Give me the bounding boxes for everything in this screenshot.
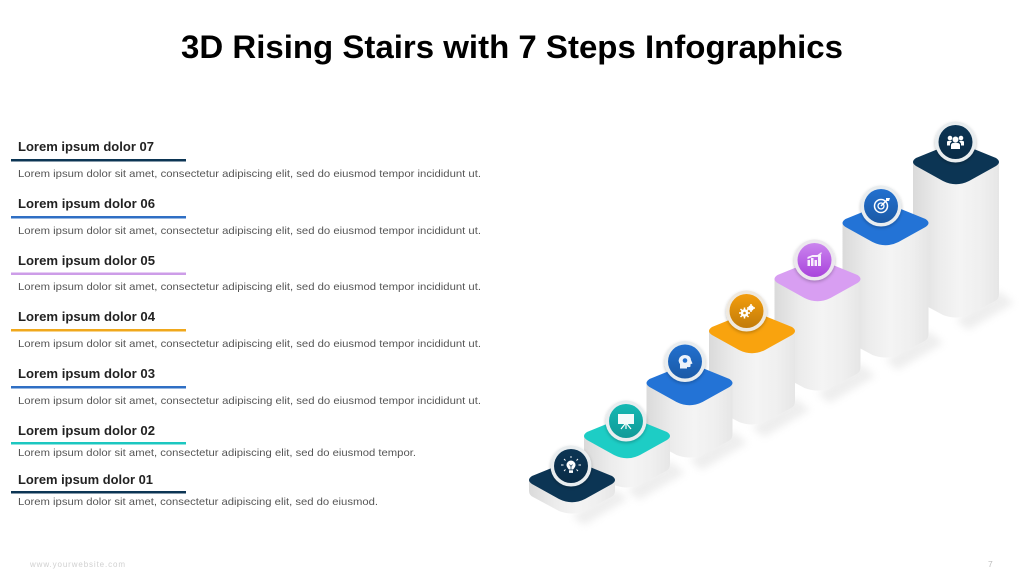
list item 01: Lorem ipsum dolor 01 (18, 472, 153, 487)
icon badge 5: bar chart (794, 240, 835, 280)
icon badge 6: target (860, 186, 902, 226)
list item 07: Lorem ipsum dolor sit amet, consectetur adipiscing elit, sed do eiusmod tempor incididunt ut. (18, 169, 481, 180)
list item 04: Lorem ipsum dolor sit amet, consectetur adipiscing elit, sed do eiusmod tempor incididunt ut. (18, 339, 481, 350)
list item 03: Lorem ipsum dolor 03 (18, 366, 155, 381)
step 5 (774, 260, 876, 403)
step 2 (584, 418, 685, 500)
step 6 (842, 204, 944, 370)
text list (11, 139, 481, 508)
list item 01: Lorem ipsum dolor sit amet, consectetur adipiscing elit, sed do eiusmod. (18, 497, 378, 508)
title: 3D Rising Stairs with 7 Steps Infographics (181, 29, 843, 65)
footer website: www.yourwebsite.com (29, 560, 125, 569)
list item 04: Lorem ipsum dolor 04 (18, 309, 156, 324)
list item 01 (11, 472, 378, 508)
icon badge 2: presentation board (606, 400, 646, 442)
icon badge 3: head with idea (664, 341, 706, 382)
step 4 (709, 312, 810, 437)
stairs chart (529, 122, 1014, 525)
list item 05: Lorem ipsum dolor 05 (18, 253, 155, 268)
icon badge 7: team (935, 122, 976, 162)
step 1 (529, 462, 628, 525)
list item 07 (11, 139, 481, 180)
list item 05: Lorem ipsum dolor sit amet, consectetur adipiscing elit, sed do eiusmod tempor incididunt ut. (18, 282, 481, 293)
list item 03: Lorem ipsum dolor sit amet, consectetur adipiscing elit, sed do eiusmod tempor incididunt ut. (18, 396, 481, 407)
list item 06: Lorem ipsum dolor 06 (18, 196, 155, 211)
list item 07: Lorem ipsum dolor 07 (18, 139, 154, 154)
icon badge 1: light bulb (550, 446, 592, 486)
list item 02: Lorem ipsum dolor sit amet, consectetur adipiscing elit, sed do eiusmod tempor. (18, 448, 416, 459)
list item 05 (11, 253, 481, 293)
step 7 (913, 144, 1014, 330)
list item 02 (11, 423, 416, 459)
list item 04 (11, 309, 481, 350)
list item 02: Lorem ipsum dolor 02 (18, 423, 155, 438)
page number: 7 (988, 559, 993, 569)
icon badge 4: gears (726, 290, 767, 332)
list item 06 (11, 196, 481, 237)
step 3 (646, 364, 748, 470)
list item 06: Lorem ipsum dolor sit amet, consectetur adipiscing elit, sed do eiusmod tempor incididunt ut. (18, 226, 481, 237)
list item 03 (11, 366, 481, 407)
